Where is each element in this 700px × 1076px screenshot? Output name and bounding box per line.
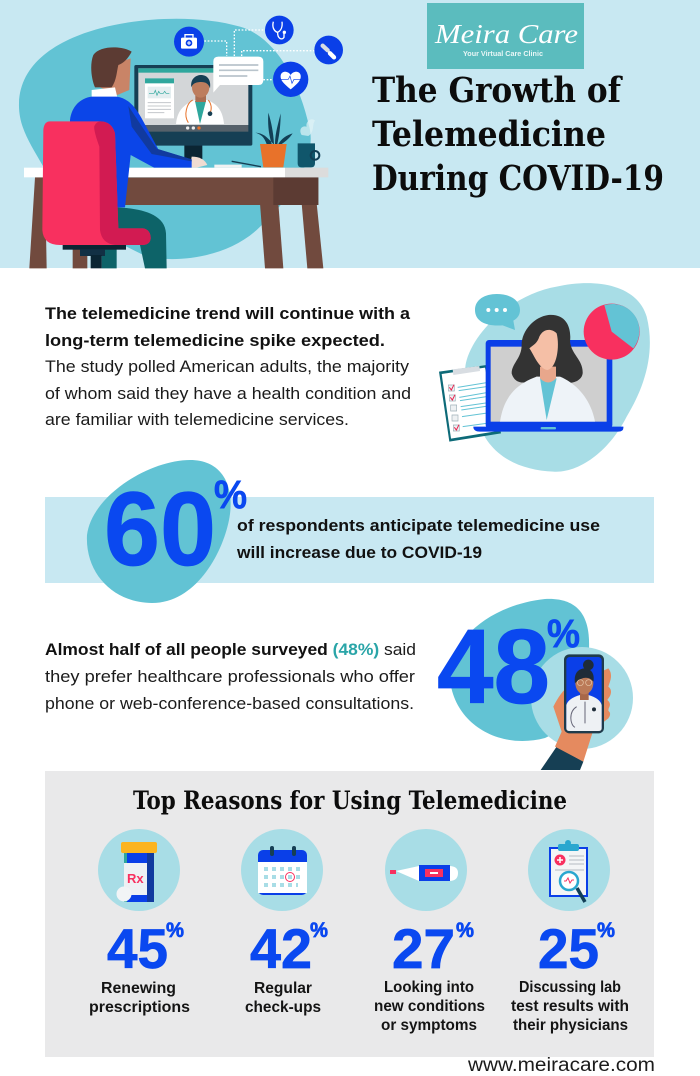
blob bbox=[450, 599, 589, 741]
logo bbox=[427, 3, 584, 69]
icon: clipboard with magnifier bbox=[528, 829, 610, 911]
text block: 48 percent: they prefer healthcare professionals who offer bbox=[45, 667, 415, 686]
pie chart bbox=[584, 304, 640, 360]
icon dotted connectors bbox=[204, 30, 315, 80]
value: % bbox=[310, 919, 328, 942]
percent sign: % bbox=[547, 612, 580, 656]
band: 60% statistic bbox=[45, 460, 654, 603]
statistic text bbox=[236, 516, 600, 562]
statistic text: of respondents anticipate telemedicine use bbox=[237, 516, 600, 535]
title bbox=[372, 70, 664, 199]
icon: pill bottle: Rx bbox=[127, 871, 144, 886]
illustration: doctor on laptop bbox=[439, 283, 650, 472]
header panel bbox=[0, 0, 700, 268]
label: test results with bbox=[511, 998, 629, 1015]
icon: pills bbox=[314, 36, 343, 64]
reason: check-ups bbox=[241, 829, 328, 1016]
blob bbox=[465, 283, 650, 472]
desk bbox=[24, 161, 328, 268]
logo: Meira Care bbox=[434, 19, 578, 49]
label bbox=[511, 979, 629, 1034]
icon: calendar bbox=[241, 829, 323, 911]
background blob bbox=[19, 19, 311, 259]
hand holding phone bbox=[541, 654, 611, 770]
laptop bbox=[473, 340, 623, 432]
title: The Growth of bbox=[372, 70, 623, 111]
label: prescriptions bbox=[89, 999, 190, 1016]
logo: Your Virtual Care Clinic bbox=[463, 49, 543, 58]
48 percent graphic bbox=[437, 599, 633, 770]
value: % bbox=[166, 919, 184, 942]
value: 27 bbox=[392, 917, 455, 980]
blob bbox=[87, 460, 231, 603]
panel: top reasons bbox=[45, 771, 654, 1057]
number 48: 48 bbox=[437, 608, 550, 726]
icon: pill bottle bbox=[98, 829, 180, 911]
label: or symptoms bbox=[381, 1017, 477, 1034]
label: new conditions bbox=[374, 998, 485, 1015]
text block: telemedicine trend: The telemedicine trend will continue with a bbox=[45, 304, 411, 323]
text block: telemedicine trend: long-term telemedicine spike expected. bbox=[45, 331, 385, 350]
text block: 48 percent bbox=[45, 640, 416, 713]
reason: lab results bbox=[511, 829, 629, 1034]
label: their physicians bbox=[513, 1017, 628, 1034]
label bbox=[89, 980, 190, 1016]
female doctor bbox=[500, 315, 595, 422]
statistic text: will increase due to COVID-19 bbox=[236, 543, 482, 562]
reason: prescriptions bbox=[89, 829, 190, 1016]
title: Telemedicine bbox=[372, 114, 606, 155]
man legs bbox=[102, 207, 167, 268]
plant bbox=[255, 113, 293, 167]
value: % bbox=[597, 919, 615, 942]
value: % bbox=[456, 919, 474, 942]
heading: Top Reasons for Using Telemedicine bbox=[133, 786, 567, 815]
illustration: patient on video call with doctor bbox=[19, 16, 343, 268]
label bbox=[374, 979, 485, 1034]
label: Renewing bbox=[101, 980, 176, 997]
label bbox=[245, 980, 321, 1016]
website url: www.meiracare.com bbox=[467, 1055, 655, 1076]
value: 25 bbox=[538, 917, 599, 980]
reason: new conditions bbox=[374, 829, 485, 1034]
icon: heart pulse bbox=[273, 62, 308, 97]
text block: 48 percent: Almost half of all people surveyed (48%) said bbox=[45, 640, 416, 659]
label: Regular bbox=[254, 980, 312, 997]
monitor bbox=[134, 65, 252, 159]
text block: telemedicine trend: of whom said they have a health condition and bbox=[45, 384, 411, 403]
label: Discussing lab bbox=[519, 979, 621, 996]
label: check-ups bbox=[245, 999, 321, 1016]
man at desk bbox=[70, 47, 207, 207]
text block: telemedicine trend bbox=[45, 304, 411, 429]
number 60: 60 bbox=[104, 471, 216, 588]
text block: 48 percent: phone or web-conference-based consultations. bbox=[45, 694, 414, 713]
icon: medical kit bbox=[174, 27, 204, 57]
red office chair bbox=[42, 121, 151, 268]
value: 42 bbox=[250, 917, 312, 980]
text block: telemedicine trend: are familiar with telemedicine services. bbox=[45, 410, 349, 429]
label: Looking into bbox=[384, 979, 474, 996]
value: 45 bbox=[107, 917, 168, 980]
icon: stethoscope bbox=[265, 16, 294, 44]
icon: thermometer bbox=[385, 829, 467, 911]
coffee mug bbox=[298, 119, 319, 167]
chat bubble bbox=[475, 294, 520, 330]
speech bubble bbox=[213, 57, 263, 93]
percent sign: % bbox=[214, 473, 247, 517]
text block: telemedicine trend: The study polled American adults, the majority bbox=[45, 357, 410, 376]
circle behind phone bbox=[531, 647, 633, 749]
clipboard bbox=[439, 365, 501, 442]
